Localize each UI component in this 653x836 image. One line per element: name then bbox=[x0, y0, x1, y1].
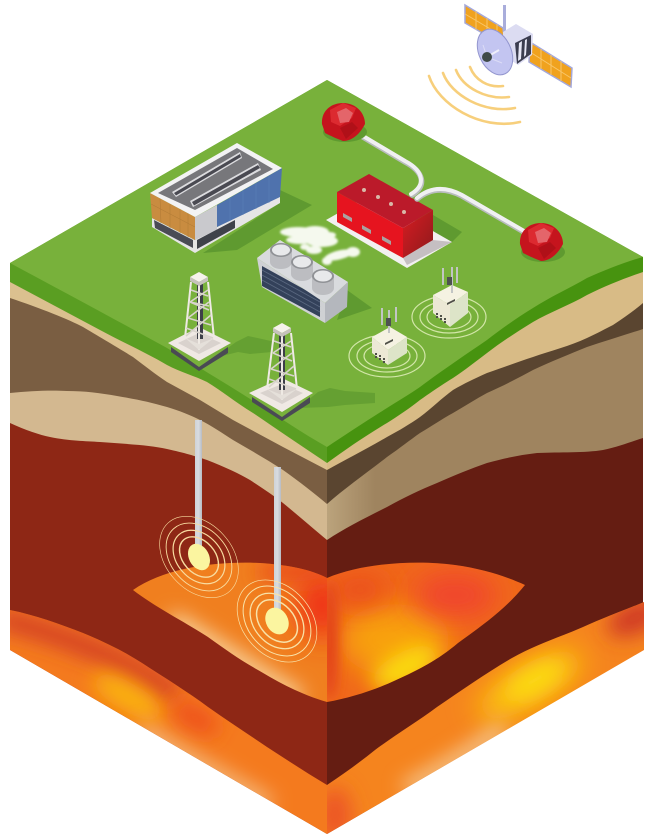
pipeline: to upper dome bbox=[358, 133, 422, 195]
left face: rock strata bbox=[10, 263, 327, 834]
oil derrick: right bbox=[249, 323, 375, 421]
satellite bbox=[429, 5, 572, 124]
well: left bbox=[144, 420, 254, 613]
well: right bbox=[221, 467, 333, 678]
signal rings bbox=[412, 296, 486, 338]
telecom station: front bbox=[349, 307, 425, 377]
heat rings: left well bbox=[144, 501, 254, 613]
dark red layer right bbox=[327, 250, 643, 834]
cooling unit shadow bbox=[337, 290, 372, 320]
warehouse shadow bbox=[203, 190, 312, 253]
satellite dish bbox=[470, 23, 520, 81]
satellite body bbox=[503, 24, 533, 65]
geothermal dome: upper bbox=[322, 103, 367, 142]
signal rings bbox=[349, 335, 425, 377]
telecom station: rear bbox=[412, 267, 486, 338]
solar panel: right bbox=[529, 42, 572, 87]
dark brown layer right bbox=[327, 250, 643, 504]
derrick shadow bbox=[214, 336, 275, 358]
lower lava layer: left bbox=[0, 600, 330, 836]
light tan layer left bbox=[10, 263, 327, 540]
steam bbox=[280, 226, 360, 265]
plant base bbox=[326, 195, 452, 268]
magma chamber: right side bbox=[327, 562, 525, 702]
grass top with edge bbox=[10, 80, 643, 463]
pipeline: to right dome bbox=[417, 189, 524, 232]
cooling tower unit bbox=[257, 226, 372, 323]
brown layer left bbox=[10, 263, 327, 504]
derrick shadow bbox=[298, 388, 375, 408]
oil derrick: left bbox=[168, 272, 275, 371]
right face: rock strata bbox=[327, 250, 643, 834]
top sand strip left bbox=[10, 263, 327, 470]
satellite antenna bbox=[503, 5, 506, 33]
red power plant bbox=[326, 174, 462, 268]
plant shadow bbox=[433, 215, 462, 242]
geothermal dome: right bbox=[520, 223, 565, 262]
magma chamber: left side bbox=[133, 562, 327, 702]
dark tan layer right bbox=[327, 250, 643, 540]
red rock layer left bbox=[10, 263, 327, 834]
warehouse building bbox=[150, 143, 312, 253]
sand strip right bbox=[327, 250, 643, 470]
radio waves bbox=[429, 67, 520, 124]
heat rings: right well bbox=[221, 564, 333, 678]
solar panel: left bbox=[465, 5, 505, 46]
lower lava layer: right bbox=[327, 602, 644, 834]
